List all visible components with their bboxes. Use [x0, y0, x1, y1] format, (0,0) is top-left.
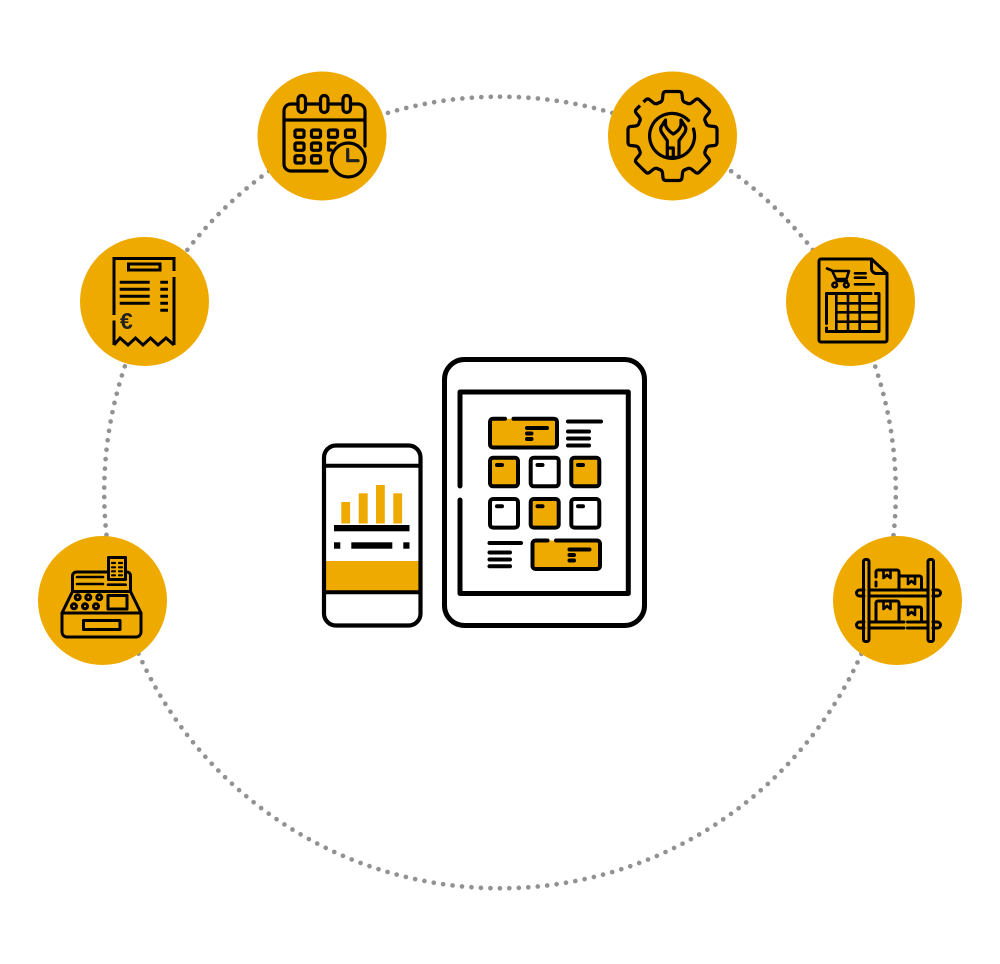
calendar drawing — [284, 96, 365, 177]
sheet disc — [786, 237, 915, 366]
dotted ring — [104, 97, 896, 888]
icon: gear and wrench — [608, 72, 737, 200]
gear drawing — [628, 92, 717, 180]
receipt disc — [80, 237, 209, 366]
sheet drawing — [819, 259, 887, 342]
wide card bottom — [490, 540, 600, 569]
tablet body — [444, 360, 644, 626]
euro sign: € — [120, 308, 133, 334]
phone lines — [334, 525, 410, 549]
register disc — [38, 536, 167, 665]
register drawing — [62, 558, 141, 637]
icon: tablet — [444, 360, 644, 626]
calendar disc — [258, 72, 386, 200]
icon: receipt — [80, 237, 209, 366]
receipt drawing — [114, 258, 174, 345]
central devices — [324, 360, 644, 626]
icon: cash register — [38, 536, 167, 665]
phone bar chart — [341, 485, 402, 524]
tile grid — [490, 458, 599, 528]
phone body — [324, 446, 420, 626]
shelf disc — [833, 536, 962, 665]
icon: smartphone — [324, 446, 420, 626]
icon: warehouse shelf — [833, 536, 962, 665]
wide card top — [490, 419, 601, 448]
gear disc — [608, 72, 737, 200]
icon: calendar — [258, 72, 386, 200]
phone orange band — [325, 561, 420, 591]
tablet screen — [460, 392, 628, 594]
shelf drawing — [856, 560, 940, 642]
icon: order sheet with cart — [786, 237, 915, 366]
